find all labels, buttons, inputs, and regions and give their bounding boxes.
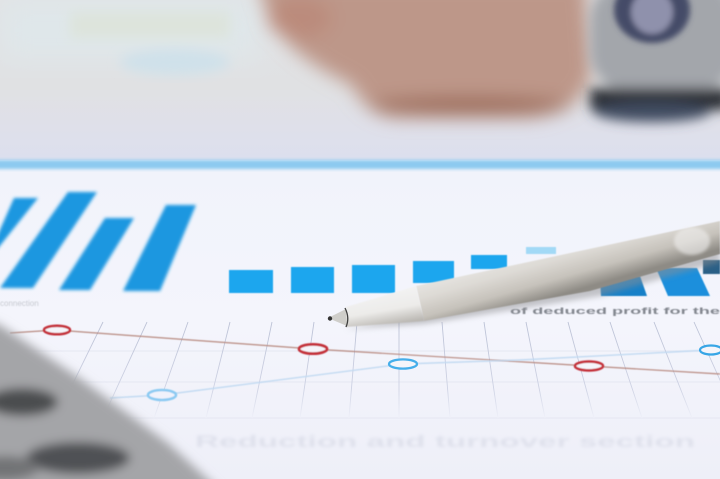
camera lens [614, 0, 690, 43]
blurred camera object [590, 0, 720, 122]
pen point [328, 309, 347, 326]
pen [328, 221, 720, 327]
bar chart: slanted blurred bars [0, 192, 196, 291]
pen tip cone [346, 286, 424, 327]
blurred hand [258, 0, 592, 118]
bar chart: sharper bars [229, 247, 720, 296]
blue header band [0, 160, 720, 169]
small text under bars: of deduced profit for the [510, 306, 720, 317]
paper sheet [0, 172, 720, 479]
line chart: red series [10, 326, 720, 374]
line chart: blue series [110, 346, 720, 400]
blurred background [0, 0, 720, 160]
pen shadow [345, 250, 720, 329]
pen ball [328, 316, 332, 321]
pen tip ring [345, 308, 348, 327]
pen barrel [416, 221, 720, 321]
chart grid [0, 351, 720, 418]
pen engraving [674, 227, 710, 255]
text: connection [0, 299, 39, 308]
blurred calculator at bottom left [0, 318, 225, 479]
blurred text at the bottom: Reduction and turnover section [195, 432, 695, 451]
